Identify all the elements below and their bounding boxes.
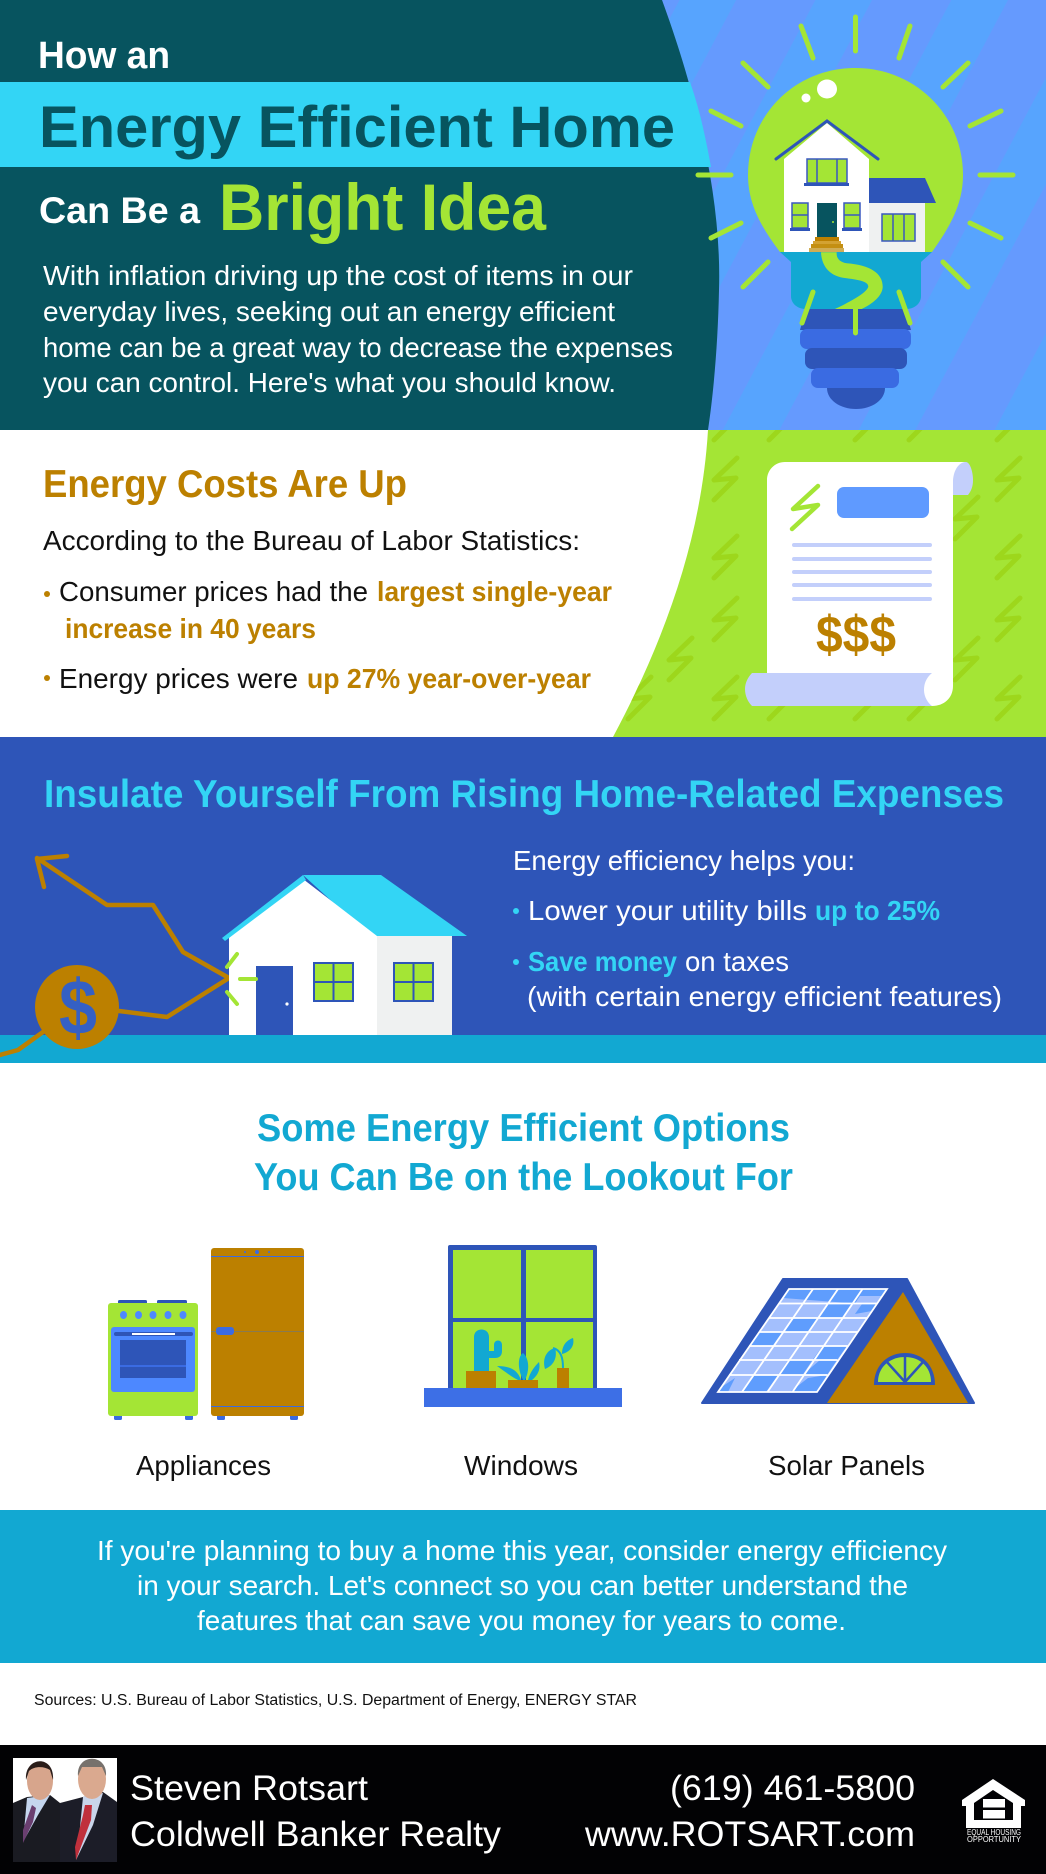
panel: call to action: in your search. Let's connect so you can better understand the (137, 1570, 908, 1601)
icon: equal housing opportunity (962, 1779, 1025, 1844)
helps you text (513, 845, 1002, 1012)
icon: solar panels (702, 1279, 974, 1403)
agent name (130, 1769, 502, 1854)
heading: energy efficient options: Some Energy Efficient Options (257, 1107, 790, 1150)
icon: light bulb with house (698, 17, 1013, 409)
icon: dollar coin: $ (59, 963, 97, 1051)
heading: energy efficient options (254, 1107, 793, 1199)
icon: house (222, 875, 467, 1035)
helps you text: Energy efficiency helps you: (513, 845, 855, 876)
panel: agent footer (0, 1745, 1046, 1874)
bulb highlights (802, 80, 837, 102)
icon: appliances (108, 1248, 304, 1420)
lightning pattern (628, 398, 1020, 719)
energy ticks (227, 954, 256, 1004)
heading: Energy Costs Are Up (43, 463, 407, 506)
intro paragraph (43, 260, 673, 398)
icon: equal housing opportunity: EQUAL HOUSING (967, 1828, 1021, 1837)
bullet one: increase in 40 years (65, 613, 316, 644)
contact details: www.ROTSART.com (584, 1815, 915, 1854)
bulb house (776, 121, 936, 252)
bulb base (800, 309, 911, 409)
helps you text: up to 25% (815, 895, 940, 926)
panel: call to action: features that can save you money for years to come. (197, 1605, 846, 1636)
bill label (837, 487, 929, 518)
agent photo (13, 1758, 117, 1862)
heading: energy efficient options: You Can Be on the Lookout For (254, 1156, 793, 1199)
helps you text: on taxes (685, 946, 789, 977)
icon: dollar coin (35, 963, 119, 1051)
sill (424, 1388, 622, 1407)
title (38, 35, 675, 244)
intro paragraph: With inflation driving up the cost of items in our (43, 260, 633, 291)
bill curl (950, 462, 973, 495)
bill lines (792, 543, 932, 601)
bullet one: Consumer prices had the (59, 576, 368, 607)
bullet one (44, 576, 612, 644)
bolt on bill (792, 486, 818, 529)
contact details: (619) 461-5800 (670, 1769, 915, 1808)
bill roll (745, 673, 932, 706)
panel: call to action: If you're planning to buy a home this year, consider energy efficiency (97, 1535, 947, 1566)
agent name: Coldwell Banker Realty (130, 1815, 502, 1854)
panel: insulate yourself (0, 737, 1046, 1063)
lead: According to the Bureau of Labor Statistics: (43, 525, 580, 556)
refrigerator (211, 1248, 304, 1420)
solar grid (718, 1289, 887, 1392)
bullet two: Energy prices were (59, 663, 298, 694)
option labels: Solar Panels (768, 1450, 925, 1481)
helps you text: Lower your utility bills (528, 895, 807, 926)
arched window (874, 1353, 935, 1385)
panel: energy costs green background (613, 430, 1046, 737)
plants (466, 1330, 573, 1388)
icon: equal housing opportunity: OPPORTUNITY (967, 1835, 1022, 1844)
rising cost arrow (0, 856, 229, 1055)
option labels (136, 1450, 925, 1481)
bill sheet (767, 462, 966, 706)
helps you text: (with certain energy efficient features) (527, 981, 1002, 1012)
bullet two: up 27% year-over-year (307, 663, 591, 694)
bullet two (44, 663, 591, 694)
option labels: Appliances (136, 1450, 271, 1481)
light rays (698, 17, 1013, 333)
panel: header background (0, 0, 1046, 430)
sources: Sources: U.S. Bureau of Labor Statistics, U.S. Department of Energy, ENERGY STAR (34, 1692, 637, 1709)
heading: Insulate Yourself From Rising Home-Related Expenses (44, 773, 1004, 816)
dollar signs: $$$ (816, 606, 896, 664)
panel: energy costs text (43, 463, 612, 694)
panel: call to action (0, 1510, 1046, 1663)
option labels: Windows (464, 1450, 578, 1481)
bullet one: largest single-year (377, 576, 612, 607)
icon: window (424, 1245, 622, 1407)
title: Can Be a (39, 190, 200, 231)
winding path (821, 252, 883, 309)
stove (108, 1300, 198, 1420)
intro paragraph: you can control. Here's what you should know. (43, 367, 616, 398)
title: Bright Idea (219, 170, 547, 244)
bulb neck (780, 252, 932, 309)
icon: energy bill (745, 462, 973, 706)
contact details (584, 1769, 915, 1854)
title: How an (38, 35, 170, 77)
agent name: Steven Rotsart (130, 1769, 368, 1808)
helps you text: Save money (528, 946, 677, 977)
bulb glass (748, 68, 963, 252)
title: Energy Efficient Home (39, 95, 675, 160)
intro paragraph: home can be a great way to decrease the expenses (43, 332, 673, 363)
intro paragraph: everyday lives, seeking out an energy efficient (43, 296, 615, 327)
